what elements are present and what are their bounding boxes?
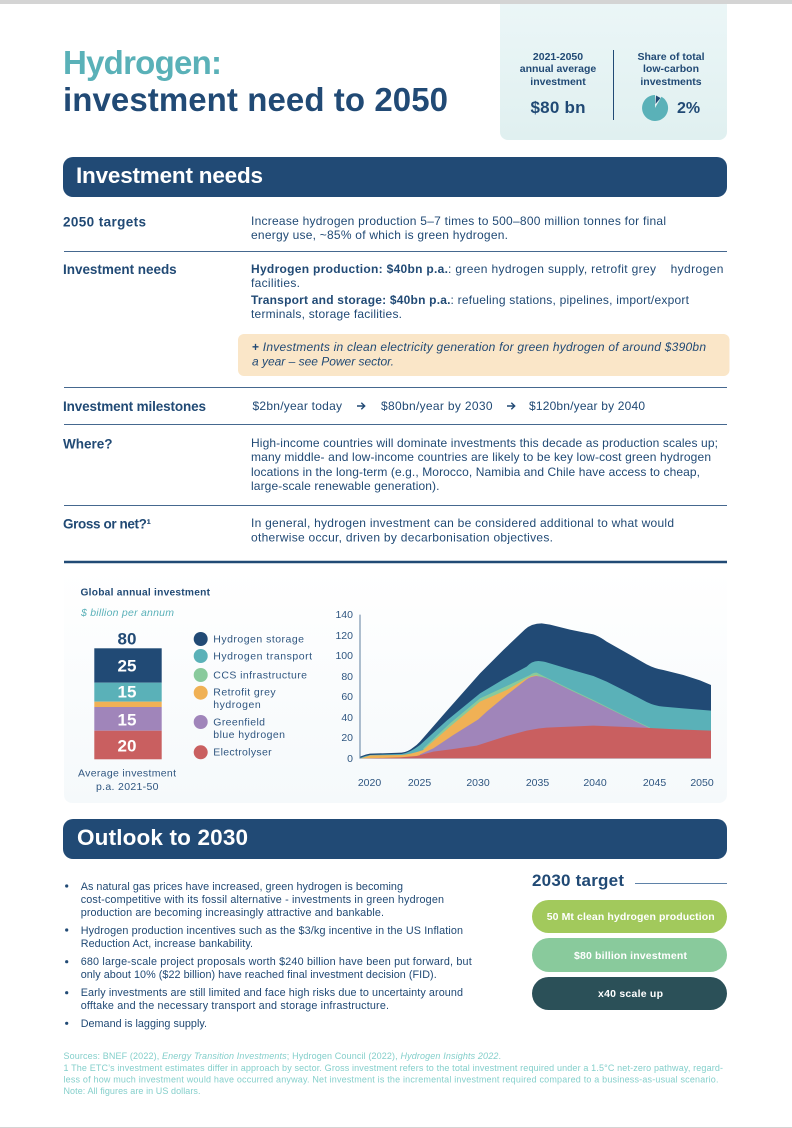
pill: x40 scale up: [532, 977, 727, 1010]
stat: annual average investment: $80 bn: [530, 98, 586, 117]
y axis labels: 60: [341, 691, 353, 703]
arrow: [357, 403, 365, 409]
row: Gross or net?: [63, 516, 674, 545]
bullet list: outlook: Early investments are still limited and face high risks due to uncertainty around: [81, 987, 463, 999]
stacked bar: average investment: 20: [118, 737, 136, 756]
stacked bar: average investment: [78, 630, 176, 793]
row: Where?: many middle- and low-income countries are likely to be key low-cost green hydrogen: [251, 450, 711, 464]
row: Investment needs: facilities.: [251, 276, 300, 290]
legend: Electrolyser: [213, 747, 272, 759]
y axis labels: [335, 609, 353, 765]
callout: clean electricity investment: a year – see Power sector.: [252, 355, 394, 369]
stat: share of total low-carbon investments: low-carbon: [643, 63, 699, 75]
bullet list: outlook: only about 10% ($22 billion) have reached final investment decision (FID).: [81, 969, 437, 981]
row: Investment milestones: $120bn/year by 2040: [529, 399, 645, 413]
footnotes: less of how much investment would have occurred anyway. Net investment is the incremental investment required compared to a business-as-usual scenario.: [64, 1074, 718, 1084]
x axis labels: 2035: [526, 777, 549, 789]
chart heading: Global annual investment: [80, 588, 211, 598]
panel: key figures: [500, 4, 727, 140]
row: Investment milestones: [63, 399, 645, 414]
row: Investment milestones: Investment milestones: [63, 399, 206, 414]
x axis labels: 2025: [408, 777, 431, 789]
stacked bar: average investment: 25: [118, 657, 136, 676]
row: Where?: locations in the long-term (e.g., Morocco, Namibia and Chile have access to cheap,: [251, 465, 700, 479]
footnotes: 1 The ETC’s investment estimates differ in approach by sector. Gross investment refers to the total investment required under a 1.5°C net-zero pathway, regard-: [64, 1063, 723, 1073]
x axis labels: 2050: [690, 777, 714, 789]
y axis labels: 140: [335, 609, 353, 621]
pill: 50 Mt clean hydrogen production: [532, 900, 727, 933]
stat: share of total low-carbon investments: Share of total: [637, 51, 705, 63]
row: Investment needs: Hydrogen production: $40bn p.a.: [251, 262, 448, 276]
callout: clean electricity investment: + Investments in clean electricity generation for green hydrogen of around $390bn: [252, 340, 706, 354]
y axis labels: 0: [347, 753, 353, 765]
footnotes: [64, 1051, 723, 1096]
bullet list: outlook: As natural gas prices have increased, green hydrogen is becoming: [81, 881, 403, 893]
title: [63, 44, 448, 118]
y axis labels: 80: [341, 671, 353, 683]
legend: Greenfield: [213, 717, 265, 729]
row: Investment needs: hydrogen: [671, 262, 723, 276]
y axis labels: 20: [341, 732, 353, 744]
stat: share of total low-carbon investments: 2%: [677, 100, 700, 117]
heading band: Outlook to 2030: Outlook to 2030: [77, 825, 248, 850]
row: Where?: Where?: [63, 436, 112, 452]
bullet list: outlook: 680 large-scale project proposals worth $240 billion have been put forward, but: [81, 956, 472, 968]
arrow: [507, 403, 515, 409]
row: Where?: High-income countries will dominate investments this decade as production scales up;: [251, 436, 718, 450]
bullet list: outlook: [65, 881, 472, 1030]
legend: Hydrogen storage: [213, 634, 304, 646]
row: 2050 targets: Increase hydrogen production 5–7 times to 500–800 million tonnes for final: [251, 214, 666, 228]
row: Where?: large-scale renewable generation).: [251, 479, 440, 493]
panel: global annual investment chart: [64, 570, 727, 803]
row: Where?: [63, 436, 718, 493]
stat: annual average investment: investment: [530, 76, 586, 88]
legend: CCS infrastructure: [213, 670, 307, 682]
stacked bar: average investment: p.a. 2021-50: [96, 781, 159, 793]
row: 2050 targets: [63, 214, 666, 242]
x axis labels: 2040: [583, 777, 607, 789]
stat: annual average investment: annual average: [520, 63, 596, 75]
row: Investment needs: [63, 262, 723, 321]
stat: annual average investment: [520, 51, 596, 117]
stacked areas: [360, 615, 711, 759]
row: Investment needs: terminals, storage facilities.: [251, 307, 402, 321]
stacked bar: average investment: 15: [118, 711, 136, 730]
row: Gross or net?: otherwise occur, driven by decarbonisation objectives.: [251, 531, 553, 545]
2030 target heading: 2030 target: [532, 871, 624, 890]
heading band: Investment needs: [63, 157, 727, 197]
title: Hydrogen:: [63, 44, 222, 81]
row: Investment milestones: $80bn/year by 2030: [381, 399, 493, 413]
stacked bar: average investment: 15: [118, 683, 136, 702]
x axis labels: 2020: [358, 777, 381, 789]
row: Gross or net?: In general, hydrogen investment can be considered additional to what would: [251, 516, 674, 530]
footnotes: Sources: BNEF (2022), Energy Transition Investments; Hydrogen Council (2022), Hydrogen Insights 2022.: [64, 1051, 501, 1061]
row: Investment needs: Investment needs: [63, 262, 177, 277]
bullet list: outlook: production are becoming increasingly attractive and bankable.: [81, 907, 384, 919]
chart unit: $ billion per annum: [80, 607, 174, 619]
stat: annual average investment: 2021-2050: [533, 51, 583, 63]
pill: 50 Mt clean hydrogen production: 50 Mt clean hydrogen production: [547, 911, 715, 923]
bullet list: outlook: Demand is lagging supply.: [81, 1018, 207, 1030]
stacked bar: average investment: 80: [118, 630, 136, 648]
bullet list: outlook: Hydrogen production incentives such as the $3/kg incentive in the US Inflation: [81, 925, 463, 937]
area chart: investment 2020-2050: [335, 609, 714, 789]
legend: Hydrogen transport: [213, 651, 312, 663]
bullet list: outlook: Reduction Act, increase bankability.: [81, 938, 253, 950]
title: investment need to 2050: [63, 81, 448, 118]
pill: $80 billion investment: $80 billion investment: [574, 950, 688, 962]
x axis labels: 2030: [466, 777, 490, 789]
stat: share of total low-carbon investments: investments: [640, 76, 702, 88]
y axis labels: 120: [335, 630, 353, 642]
callout: clean electricity investment: [238, 334, 730, 376]
heading band: Outlook to 2030: [63, 819, 727, 859]
stacked bar: average investment: Average investment: [78, 768, 176, 780]
row: Investment needs: : refueling stations, pipelines, import/export: [450, 293, 690, 307]
x axis labels: [358, 777, 714, 789]
row: 2050 targets: energy use, ~85% of which is green hydrogen.: [251, 228, 508, 242]
y axis labels: 40: [341, 712, 353, 724]
bullet list: outlook: offtake and the necessary transport and storage infrastructure.: [81, 1000, 389, 1012]
heading band: Investment needs: Investment needs: [76, 163, 263, 188]
bullet list: outlook: cost-competitive with its fossil alternative - investments in green hydrogen: [81, 894, 444, 906]
legend: blue hydrogen: [213, 729, 285, 741]
legend: Retrofit grey: [213, 687, 276, 699]
legend: hydrogen: [213, 699, 261, 711]
y axis labels: 100: [335, 650, 353, 662]
row: 2050 targets: 2050 targets: [63, 215, 146, 230]
row: Investment needs: Transport and storage: $40bn p.a.: [251, 293, 450, 307]
legend: [194, 632, 312, 759]
row: Investment milestones: $2bn/year today: [252, 399, 342, 413]
x axis labels: 2045: [643, 777, 666, 789]
pill: x40 scale up: x40 scale up: [598, 988, 663, 1000]
row: Investment needs: : green hydrogen supply, retrofit grey: [448, 262, 656, 276]
stat: share of total low-carbon investments: [637, 51, 705, 121]
footnotes: Note: All figures are in US dollars.: [64, 1086, 200, 1096]
pill: $80 billion investment: [532, 938, 727, 972]
row: Gross or net?: Gross or net?¹: [63, 516, 152, 531]
